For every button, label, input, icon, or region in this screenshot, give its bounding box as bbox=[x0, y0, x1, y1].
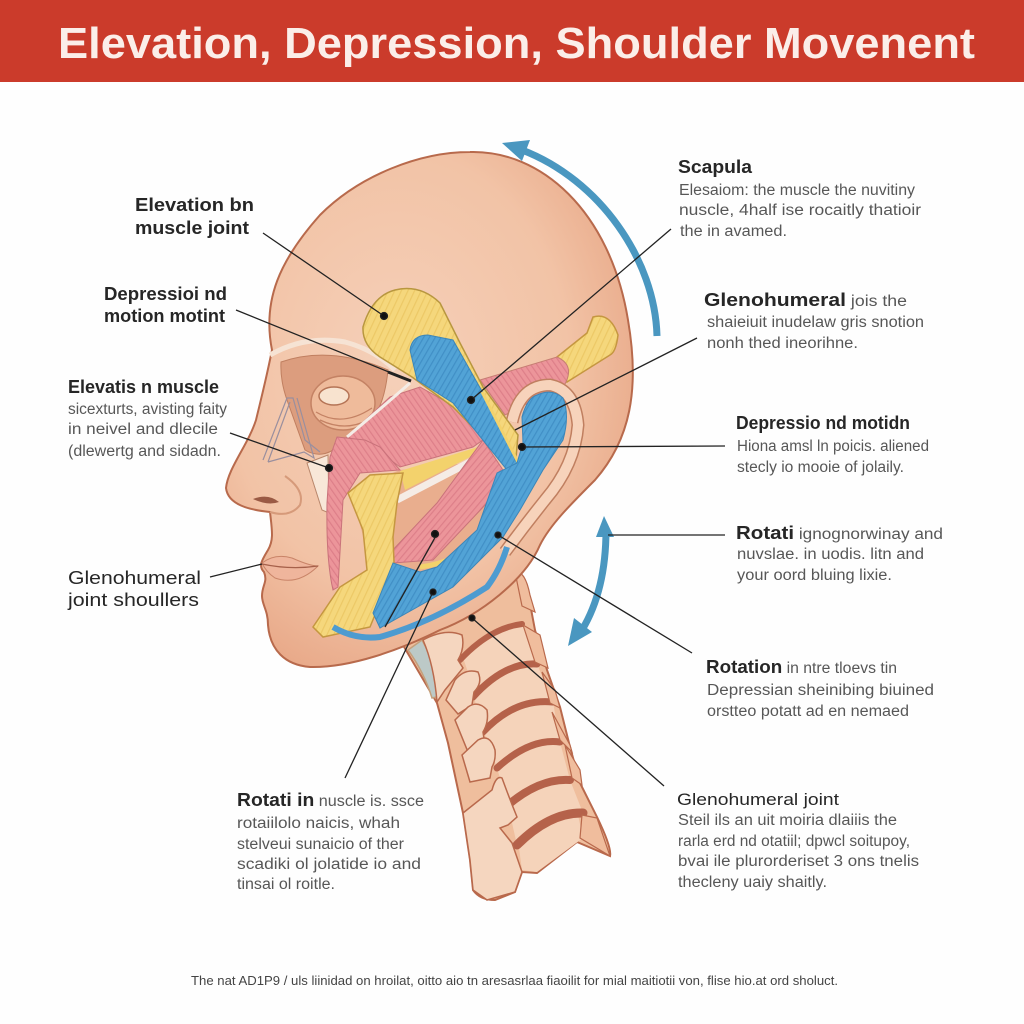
label: glenohumeral joins: nonh thed ineorihne. bbox=[707, 335, 858, 352]
label: depression motion description: Depressio nd motidn bbox=[736, 412, 910, 433]
label: rotation description: nuvslae. in uodis. litn and bbox=[737, 546, 924, 563]
vertical pink muscle bbox=[327, 437, 400, 590]
nose detail bbox=[253, 398, 329, 514]
posterior process chain bbox=[423, 632, 522, 900]
head illustration bbox=[226, 152, 633, 667]
label: rotation description bbox=[736, 522, 943, 584]
label: rotation muscle description: Rotati in nuscle is. ssce bbox=[237, 789, 424, 810]
label: glenohumeral joint description bbox=[677, 790, 919, 891]
neck and cervical spine illustration bbox=[400, 570, 610, 900]
label: glenohumeral joint description: thecleny uaiy shaitly. bbox=[678, 874, 827, 891]
label: rotation muscle description: rotaiilolo naicis, whah bbox=[237, 815, 400, 832]
label: rotation muscle description: stelveui sunaicio of ther bbox=[237, 836, 404, 853]
blue scapula muscle bbox=[410, 335, 517, 470]
label: glenohumeral joint description: Glenohumeral joint bbox=[677, 790, 839, 809]
label: scapula: the in avamed. bbox=[680, 223, 787, 240]
eye bbox=[311, 376, 375, 430]
label: glenohumeral joint shoulders: Glenohumeral bbox=[68, 567, 201, 588]
label: depression motion description: Hiona amsl ln poicis. aliened bbox=[737, 438, 929, 455]
yellow vertical bone bbox=[313, 473, 403, 637]
label: elevation muscle description bbox=[68, 376, 227, 460]
label: elevation muscle joint bbox=[135, 194, 254, 238]
stem yellow stripe bbox=[482, 392, 518, 462]
label: scapula: Scapula bbox=[678, 156, 753, 177]
label: elevation muscle description: Elevatis n muscle bbox=[68, 376, 219, 397]
arrow: upper elevation arc bbox=[502, 140, 657, 336]
transverse processes bbox=[515, 572, 610, 856]
title banner bbox=[0, 0, 1024, 82]
label: elevation muscle description: in neivel and dlecile bbox=[68, 421, 218, 438]
label: elevation muscle joint: muscle joint bbox=[135, 217, 249, 238]
label: scapula: Elesaiom: the muscle the nuvitiny bbox=[679, 182, 915, 199]
footer note: The nat AD1P9 / uls liinidad on hroilat, oitto aio tn aresasrlaa fiaoilit for mial maitiotii von, flise hio.at ord sholuct. bbox=[191, 974, 838, 988]
label: glenohumeral joint description: Steil ils an uit moiria dlaiiis the bbox=[678, 812, 897, 829]
label: glenohumeral joins: shaieiuit inudelaw gris snotion bbox=[707, 314, 924, 331]
label: scapula bbox=[678, 156, 921, 240]
label: depression motion description bbox=[736, 412, 929, 476]
label: glenohumeral joint shoulders: joint shoullers bbox=[67, 589, 199, 610]
upper pink muscle bbox=[347, 387, 487, 467]
label: glenohumeral joins bbox=[704, 289, 924, 352]
label: rotation depression description: Depressian sheinibing biuined bbox=[707, 682, 934, 699]
label: glenohumeral joint description: bvai ile plurorderiset 3 ons tnelis bbox=[678, 853, 919, 870]
label: scapula: nuscle, 4half ise rocaitly thatioir bbox=[679, 202, 921, 219]
mouth bbox=[262, 556, 318, 580]
back pink muscle bbox=[480, 357, 569, 415]
label: glenohumeral joint description: rarla erd nd otatiil; dpwcl soitupoy, bbox=[678, 833, 910, 850]
label: depression motion: Depressioi nd bbox=[104, 283, 227, 304]
label: depression motion: motion motint bbox=[104, 305, 225, 326]
label: rotation description: Rotati ignognorwinay and bbox=[736, 522, 943, 543]
label: rotation depression description: orstteo potatt ad en nemaed bbox=[707, 703, 909, 720]
label: rotation depression description bbox=[706, 656, 934, 720]
label: elevation muscle description: (dlewertg and sidadn. bbox=[68, 443, 221, 460]
vertebral bodies bbox=[462, 622, 583, 872]
label: glenohumeral joint shoulders bbox=[67, 567, 201, 610]
back yellow bone bbox=[557, 316, 618, 382]
label: rotation muscle description bbox=[237, 789, 424, 893]
blue hook band bbox=[373, 392, 566, 628]
label: elevation muscle joint: Elevation bn bbox=[135, 194, 254, 215]
head outline bbox=[226, 152, 633, 667]
label: elevation muscle description: sicexturts, avisting faity bbox=[68, 401, 227, 418]
yellow and white strips bbox=[397, 447, 478, 500]
leader lines bbox=[210, 229, 725, 786]
label: depression motion description: stecly io mooie of jolaily. bbox=[737, 459, 904, 476]
label: depression motion bbox=[104, 283, 227, 326]
vertebral discs bbox=[460, 624, 583, 845]
title: Elevation, Depression, Shoulder Movenent bbox=[58, 19, 975, 68]
oblique pink muscle bbox=[390, 440, 503, 563]
trachea bbox=[408, 640, 444, 698]
label: rotation muscle description: scadiki ol jolatide io and bbox=[237, 856, 421, 873]
label: rotation muscle description: tinsai ol roitle. bbox=[237, 876, 335, 893]
label: glenohumeral joins: Glenohumeral jois the bbox=[704, 289, 907, 310]
brow ridge bbox=[270, 340, 395, 370]
label: rotation description: your oord bluing lixie. bbox=[737, 567, 892, 584]
white tendon strips bbox=[347, 383, 410, 437]
lower blue strap bbox=[333, 547, 507, 638]
eye socket bbox=[281, 355, 388, 454]
yellow arc under muscle bbox=[420, 477, 507, 567]
yellow scapula bbox=[363, 289, 518, 470]
arrow: rotation double arc bbox=[568, 516, 614, 646]
jaw cavity bbox=[350, 460, 505, 585]
ear band bbox=[505, 385, 578, 552]
label: rotation depression description: Rotation in ntre tloevs tin bbox=[706, 656, 897, 677]
